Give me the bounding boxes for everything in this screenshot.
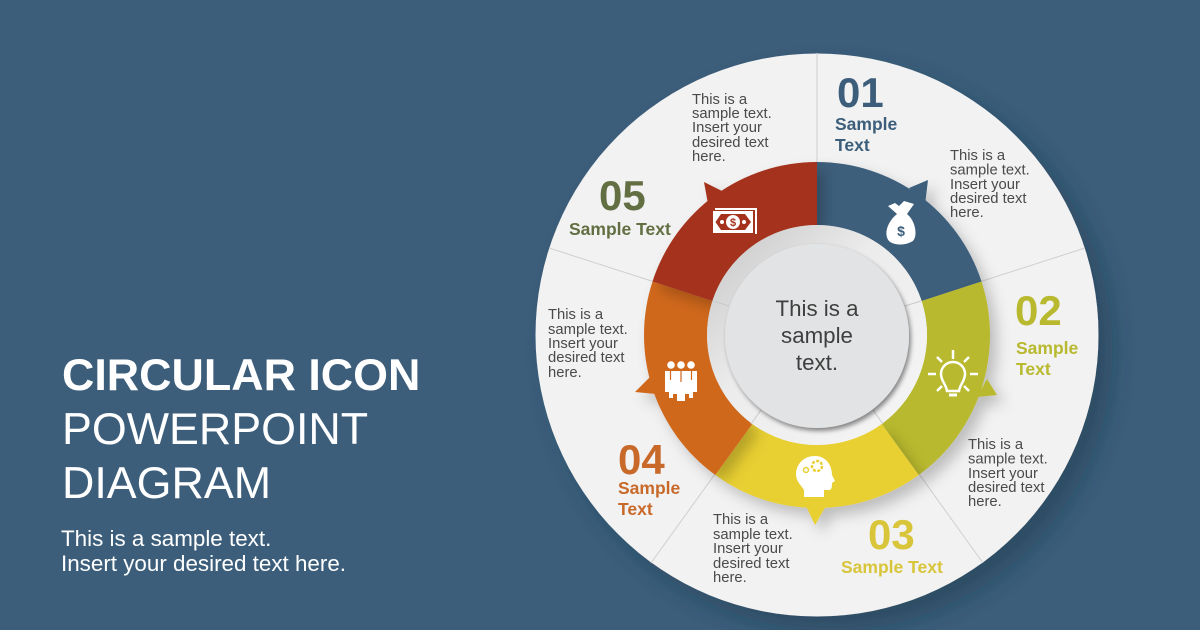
item 04 text: Insert your (548, 336, 618, 352)
panel: outer disc (536, 54, 1098, 616)
item 01 text (950, 148, 1030, 221)
item 01 heading: Sample (835, 114, 898, 134)
title block: CIRCULAR ICON (62, 350, 420, 400)
item 03 text: This is a (713, 512, 769, 528)
item 01 text: desired text (950, 191, 1026, 207)
segment 04 orange (635, 282, 752, 475)
item 04 text: desired text (548, 350, 624, 366)
segment 01 blue (817, 162, 982, 301)
center text: text. (796, 350, 838, 375)
icon: light bulb (928, 350, 978, 395)
item 04 heading: 04 (618, 436, 665, 483)
item 05 text (692, 92, 772, 165)
item 01 text: Insert your (950, 177, 1020, 193)
icon: money bag (886, 201, 916, 245)
item 05 text: sample text. (692, 106, 772, 122)
item 02 text: sample text. (968, 452, 1048, 468)
title block: DIAGRAM (62, 458, 271, 508)
subtitle: This is a sample text. (61, 526, 271, 551)
hub recess (707, 225, 927, 445)
item 02 heading (1015, 287, 1079, 379)
item 04 heading: Sample (618, 478, 681, 498)
item 02 text: Insert your (968, 466, 1038, 482)
icon: money bag: $ (897, 223, 905, 239)
item 05 text: This is a (692, 92, 748, 108)
item 01 heading: 01 (837, 69, 884, 116)
item 04 text (548, 307, 628, 381)
item 05 text: desired text (692, 135, 768, 151)
item 03 text: here. (713, 570, 747, 586)
item 02 text: here. (968, 494, 1002, 510)
item 03 text: desired text (713, 556, 790, 572)
item 02 heading: 02 (1015, 287, 1062, 334)
segment 03 yellow (715, 424, 919, 525)
item 04 text: here. (548, 365, 582, 381)
item 04 heading (618, 436, 681, 519)
center text: sample (781, 323, 853, 348)
item 04 text: This is a (548, 307, 604, 323)
item 01 text: here. (950, 205, 984, 221)
item 05 text: Insert your (692, 120, 762, 136)
item 01 heading (835, 69, 898, 155)
segment 05 red (652, 162, 817, 301)
item 03 heading: Sample Text (841, 557, 943, 577)
item 03 text: Insert your (713, 541, 783, 557)
item 02 text: This is a (968, 437, 1024, 453)
item 01 heading: Text (835, 135, 870, 155)
segment 02 olive (882, 282, 997, 475)
item 02 heading: Text (1016, 359, 1051, 379)
icon: head with gears (796, 456, 835, 497)
item 04 text: sample text. (548, 322, 628, 338)
item 03 text (713, 512, 793, 586)
item 05 text: here. (692, 149, 726, 165)
item 03 text: sample text. (713, 527, 793, 543)
item 05 heading (569, 172, 671, 239)
icon: group of people (665, 361, 697, 401)
item 01 text: sample text. (950, 162, 1030, 178)
title block (62, 350, 420, 508)
item 02 text (968, 437, 1048, 510)
title block: POWERPOINT (62, 404, 368, 454)
item 02 text: desired text (968, 480, 1044, 496)
item 05 heading: 05 (599, 172, 646, 219)
subtitle: Insert your desired text here. (61, 551, 346, 576)
item 01 text: This is a (950, 148, 1006, 164)
subtitle (61, 526, 346, 576)
icon: banknote: $ (730, 217, 736, 229)
item 05 heading: Sample Text (569, 219, 671, 239)
center circle (725, 244, 909, 428)
item 03 heading: 03 (868, 511, 915, 558)
item 03 heading (841, 511, 943, 577)
center text: This is a (775, 296, 859, 321)
item 04 heading: Text (618, 499, 653, 519)
center text (775, 296, 859, 375)
icon: banknote (713, 208, 757, 234)
item 02 heading: Sample (1016, 338, 1079, 358)
